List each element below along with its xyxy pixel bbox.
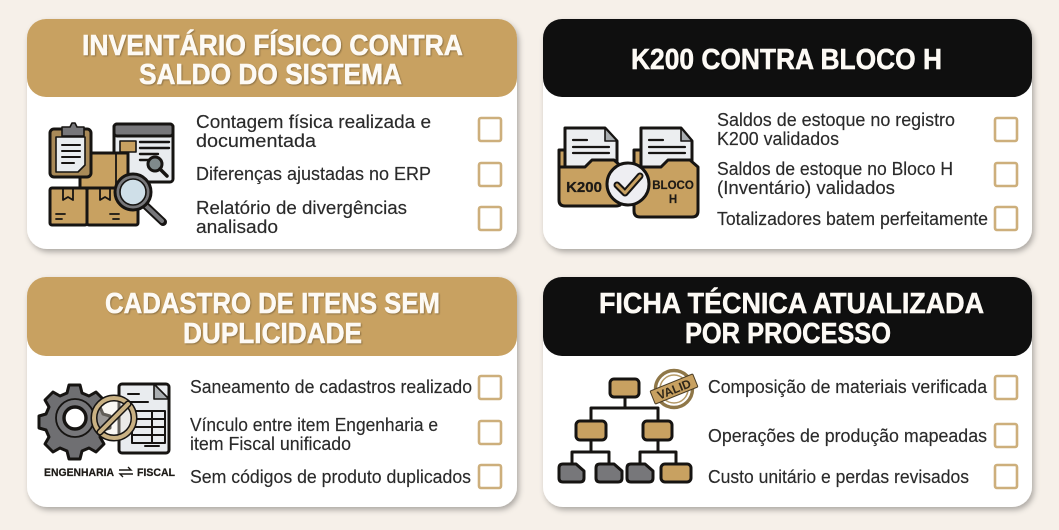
checklist: ficha técnica <box>708 376 1017 488</box>
checklist: inventário físico <box>196 112 501 237</box>
checklist: K200: Totalizadores batem perfeitamente <box>717 209 988 229</box>
icon labels: K200 and Bloco H: BLOCO <box>652 180 694 192</box>
icon: boxes, clipboard and magnifier <box>50 123 173 225</box>
checklist: cadastro: Sem códigos de produto duplicados <box>190 467 471 487</box>
panel: ficha técnica <box>543 277 1032 507</box>
icon labels: K200 and Bloco H: H <box>669 194 677 206</box>
header: cadastro: CADASTRO DE ITENS SEM <box>105 288 440 320</box>
header: inventário físico: SALDO DO SISTEMA <box>139 59 402 91</box>
panel: inventário físico <box>27 19 517 249</box>
panel: K200 contra Bloco H <box>543 19 1032 249</box>
caption: engenharia and fiscal: FISCAL <box>137 467 175 479</box>
checklist: K200: Saldos de estoque no registro <box>717 110 955 130</box>
icon labels: K200 and Bloco H: K200 <box>566 179 602 196</box>
checklist: cadastro: Saneamento de cadastros realizado <box>190 377 472 397</box>
header: cadastro <box>27 277 517 356</box>
checklist: cadastro <box>190 376 501 488</box>
header: K200: K200 CONTRA BLOCO H <box>631 44 942 76</box>
checklist: inventário físico: documentada <box>196 131 317 151</box>
caption: engenharia and fiscal: ENGENHARIA <box>44 467 114 479</box>
icon: folders with check <box>559 128 698 217</box>
icon: process tree <box>559 379 691 482</box>
caption: engenharia and fiscal <box>44 467 175 479</box>
header: cadastro: DUPLICIDADE <box>183 318 362 350</box>
header: inventário físico: INVENTÁRIO FÍSICO CONTRA <box>82 30 463 62</box>
checklist: cadastro: item Fiscal unificado <box>190 434 351 454</box>
checklist: inventário físico: Contagem física realizada e <box>196 112 431 132</box>
header: ficha técnica: FICHA TÉCNICA ATUALIZADA <box>599 288 984 320</box>
checklist: K200: Saldos de estoque no Bloco H <box>717 159 953 179</box>
checklist: inventário físico: Relatório de divergências <box>196 198 407 218</box>
checklist: ficha técnica: Custo unitário e perdas revisados <box>708 467 969 487</box>
checklist: inventário físico: Diferenças ajustadas no ERP <box>196 164 431 184</box>
header: K200 <box>543 19 1032 97</box>
checklist: K200 <box>717 110 1017 230</box>
checklist: K200: K200 validados <box>717 129 839 149</box>
icon: valid stamp <box>650 370 698 408</box>
header: ficha técnica: POR PROCESSO <box>685 318 891 350</box>
panel: cadastro de itens <box>27 277 517 507</box>
header: ficha técnica <box>543 277 1032 356</box>
header: inventário físico <box>27 19 517 97</box>
icon: valid stamp: VALID <box>655 376 693 403</box>
checklist: inventário físico: analisado <box>196 217 278 237</box>
icon: gear, document and prohibition sign <box>39 384 169 459</box>
checklist: ficha técnica: Operações de produção mapeadas <box>708 426 987 446</box>
icon labels: K200 and Bloco H <box>566 179 694 206</box>
checklist: cadastro: Vínculo entre item Engenharia e <box>190 415 438 435</box>
checklist: K200: (Inventário) validados <box>717 178 895 198</box>
checklist: ficha técnica: Composição de materiais verificada <box>708 377 988 397</box>
